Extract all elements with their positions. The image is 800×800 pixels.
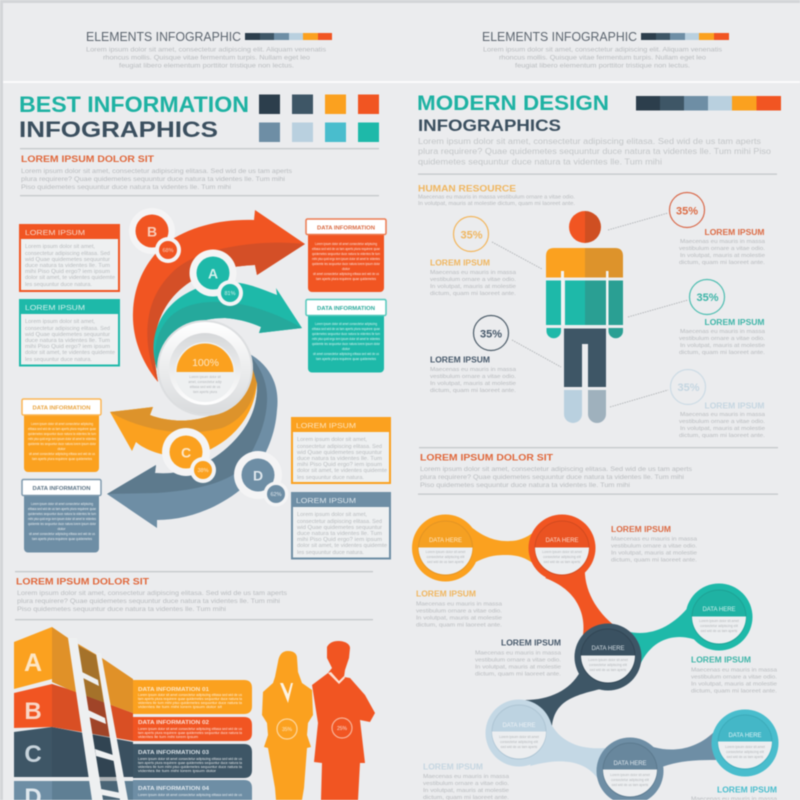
data box yellow: tam aperts plura requirere quae quidemetes [32,457,92,461]
callout: teal 35%: Maecenas eu mauris in massa [680,329,766,335]
data box blue: dolor [58,527,66,531]
human resource text: Maecenas eu mauris in massa vestibulum ornare a vitae odio. [418,194,575,200]
data box blue: quidemetes sequuntur duce natura ta videntes lle tum [28,512,96,516]
data box teal: dolor [342,347,351,351]
data box yellow: sit amet consectetur adipiscing elitasa sed wid de us [29,452,95,456]
arrow: yellow [110,355,257,457]
box: lorem ipsum yellow: les sequuntur duce natura. [297,475,364,481]
left section text: Piso quidemetes sequuntur duce natura ta videntes lle. Tum mihi [21,185,231,191]
label: yellow node [416,590,503,628]
label: yellow node: In volutpat, mauris at molestie [416,616,502,622]
node: dark [574,624,642,690]
callout: teal 35%: dictum, quam mi laoreet ante. [679,350,766,356]
node: orange: sed wid de us tam aperts [544,560,581,564]
block A: tam aperts plura requirere quae quidemetes sequuntur duce natura ta [138,697,242,701]
lower left heading: LOREM IPSUM DOLOR SIT [16,576,150,586]
block C: videntes lle tum mihi piso quidemetes sequuntur duce natura ta [138,765,242,769]
callout: light 35%: vestibulum ornare a vitae odio. [679,419,766,425]
left section text [21,169,292,191]
right colour bar [636,96,781,110]
right intro text: quidemetes sequuntur duce natura ta videntes lle. Tum mihi [418,158,662,166]
right intro text: plura requirere? Quae quidemetes sequuntur duce natura ta videntes lle. Tum mihi Piso [418,147,772,156]
callout: dark 35% [430,316,561,394]
data box yellow: quidemetes sequuntur duce natura ta videntes lle tum [28,432,96,436]
callout: light 35%: dictum, quam mi laoreet ante. [679,433,766,439]
label: light blue node: Maecenas eu mauris in massa [423,774,510,780]
block A: videntes lle tum mihi piso quidemetes sequuntur duce natura ta [138,701,242,705]
box: lorem ipsum blue: LOREM IPSUM [296,496,356,505]
label: yellow node: vestibulum ornare a vitae odio. [416,608,503,614]
right header text: feugiat libero elementum porttitor tristique non lectus. [515,64,690,70]
box: lorem ipsum orange [19,224,120,291]
box: lorem ipsum teal: wid Quae quidemetes sequuntur [25,332,110,338]
label: teal node [691,656,778,694]
node: grey blue: DATA HERE [613,761,647,767]
callout: dark 35%: dictum, quam mi laoreet ante. [430,388,517,394]
box: lorem ipsum teal: LOREM IPSUM [25,303,85,312]
data box teal: DATA INFORMATION [317,306,375,312]
callout: orange 35%: 35% [676,206,698,218]
label: orange node: dictum, quam mi laoreet ante. [611,558,698,564]
connector: grey to cyan [640,732,716,772]
left main title [19,92,249,142]
head [569,211,601,243]
data box yellow: quidemte les sequuntur duce natura lorem ipsum dolor [28,442,97,446]
human resource text: In volutpat, mauris at molestie dictum, quam mi laoreet ante. [418,201,575,207]
centre circle 100%: elitasa sed wid de us [190,385,221,389]
block C: videntes lle tum mihi lorem ipsum dolor [138,769,217,773]
callout: dark 35%: LOREM IPSUM [430,356,490,364]
right header text: Lorem ipsum dolor sit amet, consectetur adipiscing elit. Aliquam venenatis [483,48,722,54]
silhouette: man: 25% [337,726,348,732]
data box blue: tam aperts plura requirere quae quidemetes [32,537,92,541]
left header text: rhoncus mollis. Quisque vitae fermentum turpis. Nullam eget leo [103,56,311,62]
marker C: 38% [197,468,209,474]
label: orange node: Maecenas eu mauris in massa [611,536,698,542]
callout: light 35%: In volutpat, mauris at molestie [680,426,765,432]
data box orange: dolor [342,267,351,271]
node: teal [686,584,752,650]
node: light blue [486,700,552,766]
right section text [420,467,692,489]
block A: videntes lle tum mihi lorem ipsum dolor sit [138,705,222,709]
human resource heading: HUMAN RESOURCE [418,184,516,194]
callout: orange 35% [608,192,766,266]
label: teal node: Maecenas eu mauris in massa [691,668,778,674]
block D: DATA INFORMATION 04 [138,786,210,792]
human resource text [418,194,575,207]
centre circle 100%: Lorem ipsum dolor sit [189,375,221,379]
callout: dark 35%: 35% [480,328,502,340]
data box orange: mihi piso quid ergo iem ipsum dolor sit amet te videntes [312,257,380,261]
node: orange [528,514,596,582]
callout: orange 35%: In volutpat, mauris at molestie [680,253,765,259]
data box teal: Lorem ipsum dolor sit amet consectetur adipiscing [315,322,377,326]
box: lorem ipsum blue: Lorem ipsum dolor sit amet, [297,512,367,518]
left header title: ELEMENTS INFOGRAPHIC [86,30,241,44]
node: yellow: DATA HERE [429,538,462,544]
box: lorem ipsum yellow: dolor sit amet, te videntes quidemte [297,468,387,474]
left section text: Lorem ipsum dolor sit amet, consectetur adipiscing elitasa. Sed wid de us tam aperts [21,169,292,175]
centre circle 100%: tam aperts plura [193,390,217,394]
node: yellow [412,514,479,582]
node: light blue: Lorem ipsum dolor sit amet [499,735,539,739]
label: orange node [611,525,698,564]
callout: yellow 35%: Maecenas eu mauris in massa [430,270,517,276]
node: light blue: DATA HERE [502,723,536,729]
right intro text [418,137,772,166]
callout: dark 35%: In volutpat, mauris at molestie [430,381,516,387]
label: dark node: In volutpat, mauris at molestie [475,664,561,670]
callout: teal 35%: vestibulum ornare a vitae odio. [679,336,766,342]
label: cyan node [691,786,778,800]
block B: tam aperts plura requirere quae quidemetes sequuntur duce natura ta [138,731,242,735]
label: yellow node: Maecenas eu mauris in massa [416,602,503,608]
box: lorem ipsum yellow: consectetur adipiscing elitasa. Sed [297,444,382,450]
callout: dark 35%: Maecenas eu mauris in massa [430,367,517,373]
marker D: D [253,468,263,484]
box: lorem ipsum orange: LOREM IPSUM [25,228,85,237]
node: cyan: sed wid de us tam aperts [727,755,764,759]
callout: dark 35%: vestibulum ornare a vitae odio. [430,374,517,380]
data box orange: tam aperts plura requirere quae quidemetes [316,277,376,281]
node: grey blue [596,738,664,800]
label: light blue node [423,762,510,800]
callout: yellow 35%: In volutpat, mauris at molestie [430,284,516,290]
left main title: BEST INFORMATION [19,92,249,117]
connector: dark to teal [630,605,700,665]
node: cyan: DATA HERE [728,733,762,739]
node: cyan: Lorem ipsum dolor sit amet [725,745,765,749]
marker D: 62% [270,492,282,498]
marker A: 81% [224,291,236,297]
right section text: plura requirere? Quae quidemetes sequuntur duce natura ta videntes lle. Tum mihi [420,475,684,481]
data box orange: Lorem ipsum dolor sit amet consectetur adipiscing [315,242,377,246]
block C: C [24,741,42,768]
arrow: blue [107,353,278,528]
feet [564,390,606,423]
data box teal: mihi piso quid ergo iem ipsum dolor sit amet te videntes [312,337,380,341]
box: lorem ipsum yellow: Lorem ipsum dolor sit amet, [297,437,367,443]
data box teal [306,300,386,372]
callout: light 35%: 35% [677,382,700,394]
arrow: teal [154,282,302,372]
right section text: Lorem ipsum dolor sit amet, consectetur adipiscing elitasa. Sed wid de us tam aperts [420,467,692,473]
node: grey blue: Lorem ipsum dolor sit amet [610,773,650,777]
box: lorem ipsum blue [291,492,391,558]
data box blue: elitasa sed wid de us tam aperts plura requirere quae [28,507,96,511]
block D: Lorem ipsum dolor sit amet consectetur adipiscing elitasa sed wid de us [138,793,242,797]
label: yellow node: dictum, quam mi laoreet ante. [416,622,503,628]
data box blue: DATA INFORMATION [32,486,91,492]
connector: yellow to orange [470,526,534,564]
box: lorem ipsum orange: Lorem ipsum dolor sit amet, [25,244,95,250]
block B: DATA INFORMATION 02 [138,720,209,726]
callout: light 35%: LOREM IPSUM [704,402,765,410]
label: dark node [475,638,562,678]
left header [86,30,332,70]
node: orange: DATA HERE [545,538,579,544]
right header title: ELEMENTS INFOGRAPHIC [482,30,637,44]
callout: teal 35%: LOREM IPSUM [704,318,765,327]
right header colour bar [641,33,729,40]
callout: orange 35%: vestibulum ornare a vitae odio. [679,246,766,252]
callout: teal 35%: 35% [696,292,719,304]
node: dark: DATA HERE [591,646,625,652]
label: dark node: LOREM IPSUM [501,638,561,648]
connector: dark to light [525,672,605,726]
data box blue: quidemte les sequuntur duce natura lorem ipsum dolor [28,522,97,526]
node: dark: sed wid de us tam aperts [590,668,627,672]
connector: orange to dark [545,565,615,636]
data box orange: sit amet consectetur adipiscing elitasa sed wid de us [313,272,379,276]
box: lorem ipsum blue: mihi Piso Quid ergo? iem ipsum [297,537,382,543]
lower left text: Lorem ipsum dolor sit amet, consectetur adipiscing elitasa. Sed wid de us tam aperts [17,591,287,597]
data box blue [22,480,101,552]
node: teal: DATA HERE [702,607,736,613]
callout: yellow 35%: LOREM IPSUM [430,258,490,268]
right intro text: Lorem ipsum dolor sit amet, consectetur adipiscing elitasa. Sed wid de us tam aperts [418,137,761,146]
data box yellow: elitasa sed wid de us tam aperts plura requirere quae [28,427,96,431]
marker C [162,428,216,483]
data box orange: elitasa sed wid de us tam aperts plura requirere quae [312,247,380,251]
callout: light 35% [610,370,766,439]
silhouette: woman: 35% [282,727,293,733]
box: lorem ipsum yellow: mihi Piso Quid ergo? iem ipsum [297,462,382,468]
left header text: feugiat libero elementum porttitor tristique non lectus. [119,64,294,70]
marker A: A [208,266,218,282]
box: lorem ipsum teal: dolor sit amet, te videntes quidemte [25,350,115,356]
block D [14,780,252,800]
label: dark node: vestibulum ornare a vitae odio. [475,658,562,664]
callout: orange 35%: Maecenas eu mauris in massa [680,239,766,245]
legs [564,328,606,387]
left header colour bar [245,33,332,40]
callout: orange 35%: LOREM IPSUM [704,228,765,237]
data box orange: DATA INFORMATION [317,226,375,232]
node: yellow: sed wid de us tam aperts [427,560,464,564]
centre circle 100%: amet, consectetur adip [188,380,222,384]
left main title: INFOGRAPHICS [19,117,218,142]
block B: videntes lle tum mihi lorem ipsum [138,735,198,739]
block A: A [24,649,42,677]
box: lorem ipsum orange: consectetur adipiscing elitasa. Sed [25,251,110,257]
box: lorem ipsum orange: duce natura ta videntes lle. Tum [25,263,110,269]
person figure [546,211,623,423]
marker C: C [181,444,191,460]
right header text: rhoncus mollis. Quisque vitae fermentum turpis. Nullam eget leo [499,56,707,62]
right main title [417,92,609,135]
node: light blue: consectetur adipiscing elit [500,740,538,744]
label: teal node: vestibulum ornare a vitae odio. [691,674,778,680]
block C: Lorem ipsum dolor sit amet consectetur adipiscing elitasa sed wid de us [138,757,242,761]
hands [546,328,623,338]
data box yellow [22,399,101,472]
block B: Lorem ipsum dolor sit amet consectetur adipiscing elitasa sed wid de us [138,727,242,731]
block A: Lorem ipsum dolor sit amet consectetur adipiscing elitasa sed wid de us [138,693,242,697]
lower left text: plura requirere? Quae quidemetes sequuntur duce natura ta videntes lle. Tum mihi [17,599,280,605]
data box blue: mihi piso quid ergo iem ipsum dolor sit amet te videntes [28,517,96,521]
data box blue: sit amet consectetur adipiscing elitasa sed wid de us [29,532,95,536]
box: lorem ipsum yellow: LOREM IPSUM [296,421,356,430]
data box yellow: mihi piso quid ergo iem ipsum dolor sit amet te videntes [28,437,96,441]
label: light blue node: In volutpat, mauris at molestie [423,788,509,794]
node: yellow: Lorem ipsum dolor sit amet [426,550,465,554]
block C [14,727,252,778]
ladder [68,638,128,800]
box: lorem ipsum blue: consectetur adipiscing elitasa. Sed [297,519,382,525]
label: orange node: In volutpat, mauris at molestie [611,550,697,556]
callout: light 35%: Maecenas eu mauris in massa [680,412,766,418]
box: lorem ipsum yellow: wid Quae quidemetes sequuntur [297,450,382,456]
marker B [129,208,181,263]
marker B: 68% [162,248,174,254]
box: lorem ipsum yellow: duce natura ta videntes lle. Tum [297,456,382,462]
marker B: B [147,224,157,240]
callout: yellow 35%: vestibulum ornare a vitae odio. [430,277,517,283]
box: lorem ipsum teal: consectetur adipiscing elitasa. Sed [25,326,110,332]
right main title: MODERN DESIGN [417,92,609,115]
label: yellow node: LOREM IPSUM [416,590,476,598]
node: teal: Lorem ipsum dolor sit amet [699,619,739,623]
node: yellow: consectetur adipiscing elit [427,555,464,559]
data box teal: sit amet consectetur adipiscing elitasa sed wid de us [313,352,379,356]
data box teal: tam aperts plura requirere quae quidemetes [316,357,376,361]
box: lorem ipsum orange: dolor sit amet, te videntes quidemte [25,275,115,281]
left section heading: LOREM IPSUM DOLOR SIT [21,154,155,164]
callout: yellow 35%: 35% [460,230,483,242]
network diagram [412,514,778,800]
box: lorem ipsum yellow [291,417,391,483]
box: lorem ipsum blue: wid Quae quidemetes sequuntur [297,525,382,531]
box: lorem ipsum blue: duce natura ta videntes lle. Tum [297,531,382,537]
label: teal node: dictum, quam mi laoreet ante. [691,688,778,694]
node: orange: Lorem ipsum dolor sit amet [542,550,582,554]
centre circle 100%: 100% [192,357,219,369]
right section heading: LOREM IPSUM DOLOR SIT [420,452,554,462]
data box blue: Lorem ipsum dolor sit amet consectetur adipiscing [31,502,93,506]
box: lorem ipsum orange: wid Quae quidemetes sequuntur [25,257,110,263]
label: teal node: In volutpat, mauris at molestie [691,682,777,688]
marker D [234,451,288,506]
left section text: plura requirere? Quae quidemetes sequuntur duce natura ta videntes lle. Tum mihi [21,177,285,183]
label: light blue node: LOREM IPSUM [423,762,483,772]
box: lorem ipsum teal: les sequuntur duce natura. [25,357,92,363]
block A [14,627,252,714]
box: lorem ipsum teal: Lorem ipsum dolor sit amet, [25,319,95,325]
node: teal: sed wid de us tam aperts [701,629,738,633]
stacked blocks chart [14,627,252,800]
silhouette: man [312,641,375,800]
callout: teal 35% [628,280,766,356]
label: orange node: LOREM IPSUM [611,525,671,534]
connector: light to grey [530,722,605,782]
marker A [190,250,243,306]
data box orange: quidemte les sequuntur duce natura lorem ipsum dolor [312,262,381,266]
block B: B [24,698,42,725]
box: lorem ipsum orange: les sequuntur duce natura. [25,282,92,288]
data box orange [306,219,386,292]
right section text: Piso quidemetes sequuntur duce natura ta videntes lle. Tum mihi [420,483,630,489]
data box yellow: Lorem ipsum dolor sit amet consectetur adipiscing [31,422,93,426]
right header text [483,48,722,70]
node: grey blue: sed wid de us tam aperts [612,783,649,787]
colour swatches [259,94,379,142]
block C: tam aperts plura requirere quae quidemetes sequuntur duce natura ta [138,761,242,765]
block C: DATA INFORMATION 03 [138,750,209,756]
silhouette: woman [262,651,313,800]
node: orange: consectetur adipiscing elit [543,555,581,559]
left header text [86,48,326,70]
arrow: orange [133,210,305,382]
torso and arms [546,271,623,325]
label: dark node: dictum, quam mi laoreet ante. [475,672,562,678]
label: orange node: vestibulum ornare a vitae odio. [611,544,698,550]
node: cyan [712,710,778,776]
data box teal: quidemetes sequuntur duce natura ta videntes lle tum [312,332,380,336]
label: dark node: Maecenas eu mauris in massa [475,650,562,656]
box: lorem ipsum blue: les sequuntur duce natura. [297,550,364,556]
callout: orange 35%: dictum, quam mi laoreet ante. [679,260,766,266]
box: lorem ipsum blue: dolor sit amet, te videntes quidemte [297,543,387,549]
centre circle 100% [157,320,253,416]
label: light blue node: vestibulum ornare a vitae odio. [423,781,510,787]
shoulders [546,248,623,278]
data box teal: quidemte les sequuntur duce natura lorem ipsum dolor [312,342,381,346]
block A: DATA INFORMATION 01 [138,687,209,693]
right header [482,30,729,70]
data box yellow: DATA INFORMATION [32,406,91,412]
box: lorem ipsum teal [19,299,120,366]
callout: yellow 35%: dictum, quam mi laoreet ante. [430,291,517,297]
data box teal: elitasa sed wid de us tam aperts plura requirere quae [312,327,380,331]
node: dark: Lorem ipsum dolor sit amet [588,658,628,662]
box: lorem ipsum teal: mihi Piso Quid ergo? iem ipsum [25,344,110,350]
node: teal: consectetur adipiscing elit [700,624,738,628]
left header text: Lorem ipsum dolor sit amet, consectetur adipiscing elit. Aliquam venenatis [86,48,326,54]
block B [14,684,252,741]
node: dark: consectetur adipiscing elit [589,663,627,667]
callout: yellow 35% [430,216,542,297]
label: cyan node: LOREM IPSUM [717,786,777,794]
box: lorem ipsum orange: mihi Piso Quid ergo? iem ipsum [25,269,110,275]
lower left text: Piso quidemetes sequuntur duce natura ta videntes lle. Tum mihi [17,607,226,613]
box: lorem ipsum teal: duce natura ta videntes lle. Tum [25,338,110,344]
label: teal node: LOREM IPSUM [691,656,751,664]
lower left text [17,591,287,613]
right main title: INFOGRAPHICS [418,116,561,135]
callout: teal 35%: In volutpat, mauris at molestie [680,343,765,349]
data box orange: quidemetes sequuntur duce natura ta videntes lle tum [312,252,380,256]
data box yellow: dolor [58,447,66,451]
node: light blue: sed wid de us tam aperts [501,745,538,749]
node: cyan: consectetur adipiscing elit [726,750,764,754]
node: grey blue: consectetur adipiscing elit [611,778,649,782]
